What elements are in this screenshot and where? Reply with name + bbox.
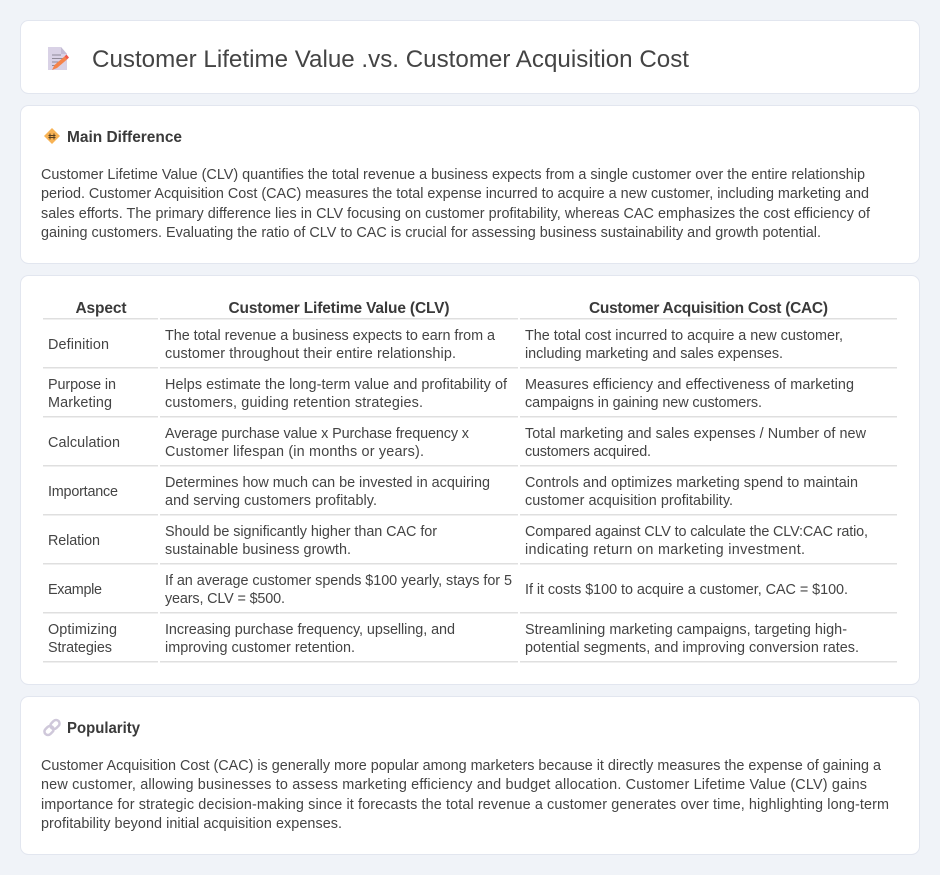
table row: example: If an average customer spends $100 yearly, stays for 5: [165, 573, 512, 589]
table row: calculation: Total marketing and sales expenses / Number of new: [525, 426, 867, 442]
text block: main difference paragraph: sales efforts. The primary difference lies in CLV focusing on customer profitability, whereas CAC emphasizes the cost efficiency of: [41, 206, 871, 222]
table row: importance: Determines how much can be invested in acquiring: [165, 475, 490, 491]
table header: Aspect: [76, 300, 126, 317]
table row: calculation: customers acquired.: [525, 444, 651, 460]
panel: main difference: [20, 106, 920, 264]
table row: definition: The total revenue a business expects to earn from a: [165, 328, 495, 344]
table row: definition: including marketing and sales expenses.: [525, 346, 783, 362]
table row: definition: Definition: [48, 337, 109, 353]
table row: relation: [43, 524, 897, 564]
text block: popularity paragraph: profitability beyond initial acquisition expenses.: [41, 816, 342, 832]
table row: calculation: [43, 426, 897, 466]
table row: importance: and serving customers profitably.: [165, 493, 377, 509]
icon: chain link: [43, 718, 61, 737]
table row: importance: Importance: [48, 484, 118, 500]
table row: optimizing strategies: potential segments, and improving conversion rates.: [525, 640, 859, 656]
title: Customer Lifetime Value .vs. Customer Acquisition Cost: [92, 46, 689, 73]
table row: optimizing strategies: Strategies: [48, 640, 112, 656]
text block: main difference paragraph: Customer Lifetime Value (CLV) quantifies the total revenue a business expects from a single customer over the entire relationship: [41, 167, 865, 183]
table row: purpose in marketing: [43, 377, 897, 418]
table row: definition: The total cost incurred to acquire a new customer,: [525, 328, 843, 344]
table row: definition: customer throughout their entire relationship.: [165, 346, 456, 362]
table row: calculation: Average purchase value x Purchase frequency x: [165, 426, 470, 442]
panel: popularity: [20, 696, 920, 854]
table header: Customer Acquisition Cost (CAC): [589, 300, 828, 317]
panel: comparison table: [20, 276, 920, 684]
table row: purpose in marketing: campaigns in gaining new customers.: [525, 395, 762, 411]
table row: optimizing strategies: Optimizing: [48, 622, 117, 638]
table row: definition: [43, 328, 897, 368]
heading: main difference: Main Difference: [67, 129, 182, 146]
table row: calculation: Calculation: [48, 435, 120, 451]
table row: purpose in marketing: Measures efficiency and effectiveness of marketing: [525, 377, 854, 393]
table row: purpose in marketing: Marketing: [48, 395, 112, 411]
table row: example: Example: [48, 582, 102, 598]
icon: document with pencil: [48, 47, 69, 70]
icon: diamond road sign: [44, 128, 60, 144]
panel: title header: [20, 20, 920, 94]
table row: relation: sustainable business growth.: [165, 542, 351, 558]
text block: popularity paragraph: [41, 758, 889, 832]
table row: example: years, CLV = $500.: [165, 591, 285, 607]
table row: importance: [43, 475, 897, 516]
text block: popularity paragraph: importance for strategic decision-making since it forecasts the total revenue a customer generates over time, highlighting long-term: [41, 797, 889, 813]
table row: relation: indicating return on marketing investment.: [525, 542, 805, 558]
text block: main difference paragraph: period. Customer Acquisition Cost (CAC) measures the total expense incurred to acquire a new customer, including marketing and: [41, 186, 869, 202]
heading: popularity: Popularity: [67, 720, 140, 737]
text block: popularity paragraph: Customer Acquisition Cost (CAC) is generally more popular among marketers because it directly measures the expense of gaining a: [41, 758, 881, 774]
table row: purpose in marketing: Purpose in: [48, 377, 116, 393]
table row: purpose in marketing: Helps estimate the long-term value and profitability of: [165, 377, 508, 393]
table row: relation: Compared against CLV to calculate the CLV:CAC ratio,: [525, 524, 868, 540]
table row: example: [43, 573, 897, 614]
table row: purpose in marketing: customers, guiding retention strategies.: [165, 395, 423, 411]
table row: optimizing strategies: improving customer retention.: [165, 640, 355, 656]
table row: optimizing strategies: [43, 622, 897, 662]
table row: example: If it costs $100 to acquire a customer, CAC = $100.: [525, 582, 848, 598]
table row: importance: customer acquisition profitability.: [525, 493, 733, 509]
table row: importance: Controls and optimizes marketing spend to maintain: [525, 475, 858, 491]
table row: optimizing strategies: Increasing purchase frequency, upselling, and: [165, 622, 455, 638]
table row: calculation: Customer lifespan (in months or years).: [165, 444, 424, 460]
table header: Customer Lifetime Value (CLV): [228, 300, 450, 317]
table row: relation: Should be significantly higher than CAC for: [165, 524, 437, 540]
text block: main difference paragraph: [41, 167, 871, 241]
table row: relation: Relation: [48, 533, 100, 549]
table row: optimizing strategies: Streamlining marketing campaigns, targeting high-: [525, 622, 847, 638]
text block: main difference paragraph: gaining customers. Evaluating the ratio of CLV to CAC is crucial for assessing business sustainability and growth potential.: [41, 225, 821, 241]
table header: [43, 300, 897, 320]
text block: popularity paragraph: new customer, allowing businesses to assess marketing efficiency and budget allocation. Customer Lifetime Value (CLV) gains: [41, 777, 867, 793]
